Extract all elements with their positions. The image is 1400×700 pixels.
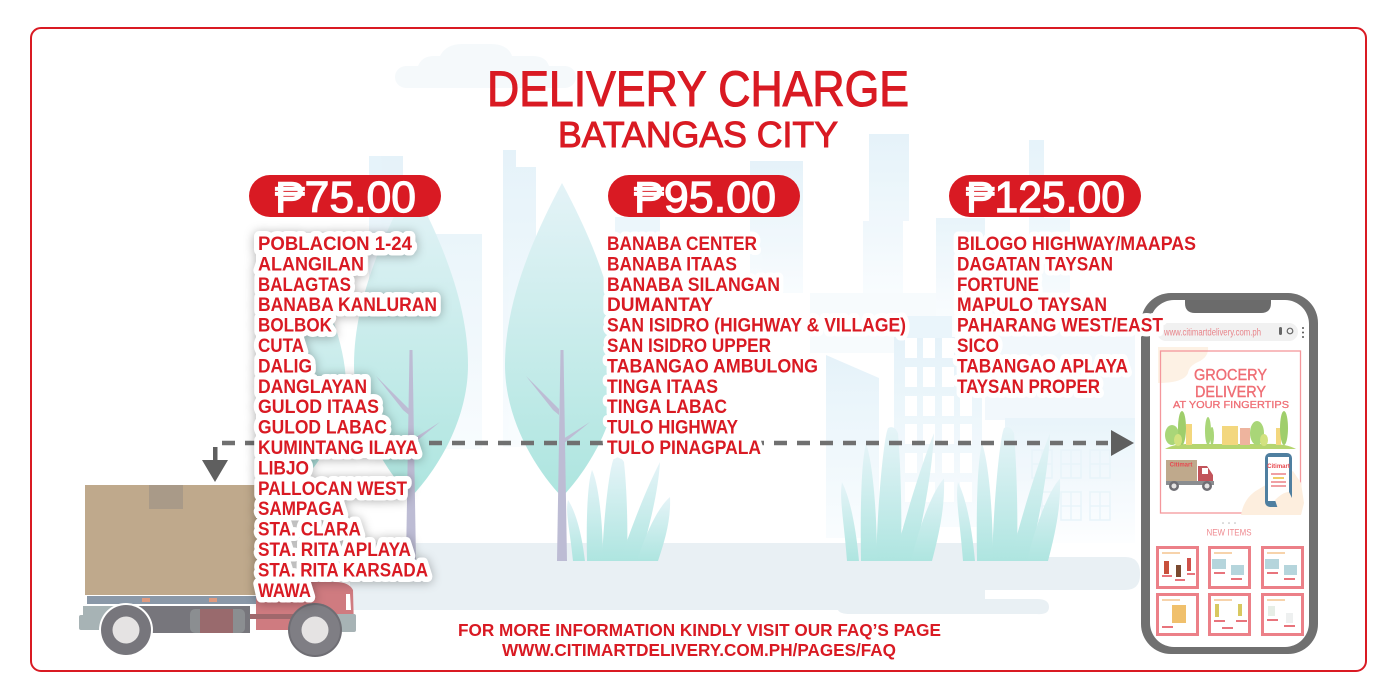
column: 125 pesos barangays: FORTUNE [957, 274, 1039, 296]
grocery delivery banner: Citimart [1170, 462, 1192, 468]
grocery delivery banner: GROCERY [1194, 367, 1267, 384]
price pill 125: ₱125.00 [966, 173, 1125, 222]
column: 95 pesos barangays: TULO PINAGPALA [607, 437, 761, 459]
column: 75 pesos barangays: WAWA [258, 580, 311, 602]
dashed route arrow [222, 430, 1134, 456]
grass tuft middle [567, 457, 670, 561]
column: 95 pesos barangays: TINGA LABAC [607, 396, 727, 418]
price pill 75: ₱75.00 [275, 173, 416, 222]
delivery truck [79, 485, 356, 657]
product thumbnail contents [1162, 552, 1297, 629]
grass tuft right two [957, 427, 1060, 561]
column: 75 pesos barangays: GULOD LABAC [258, 417, 387, 439]
column: 95 pesos barangays: BANABA SILANGAN [607, 274, 780, 296]
column: 95 pesos barangays: BANABA ITAAS [607, 253, 737, 275]
column: 75 pesos barangays: DALIG [258, 355, 312, 377]
new items heading: NEW ITEMS [1206, 528, 1252, 538]
background: city skyline [369, 134, 1135, 543]
grocery delivery banner: Citimart [1267, 464, 1290, 470]
column: 75 pesos barangays: STA. RITA KARSADA [258, 559, 428, 581]
grocery delivery banner: AT YOUR FINGERTIPS [1173, 399, 1289, 411]
column: 75 pesos barangays: PALLOCAN WEST [258, 478, 407, 500]
phone mockup: www.citimartdelivery.com.ph [1163, 328, 1261, 338]
column: 75 pesos barangays: STA. RITA APLAYA [258, 539, 411, 561]
column: 95 pesos barangays [607, 233, 906, 459]
column: 75 pesos barangays: BOLBOK [258, 315, 332, 337]
column: 125 pesos barangays: SICO [957, 335, 999, 357]
column: 75 pesos barangays: POBLACION 1-24 [258, 233, 412, 255]
column: 125 pesos barangays: MAPULO TAYSAN [957, 294, 1107, 316]
column: 95 pesos barangays: TULO HIGHWAY [607, 417, 738, 439]
column: 75 pesos barangays: KUMINTANG ILAYA [258, 437, 418, 459]
grocery delivery banner [1158, 347, 1304, 515]
column: 95 pesos barangays: DUMANTAY [607, 294, 713, 316]
column: 125 pesos barangays: BILOGO HIGHWAY/MAAPAS [957, 233, 1196, 255]
truck cab [256, 582, 354, 630]
column: 75 pesos barangays: SAMPAGA [258, 498, 344, 520]
subtitle: BATANGAS CITY [558, 114, 838, 155]
mini truck [1166, 460, 1197, 481]
footer note: FOR MORE INFORMATION KINDLY VISIT OUR FAQ’S PAGE [458, 620, 941, 640]
column: 125 pesos barangays: PAHARANG WEST/EAST [957, 315, 1163, 337]
phone mockup [1141, 293, 1318, 654]
tree middle [505, 183, 619, 561]
column: 95 pesos barangays: SAN ISIDRO UPPER [607, 335, 771, 357]
price pill 95: ₱95.00 [634, 173, 776, 222]
tree left [354, 183, 468, 561]
truck wheels [99, 603, 153, 657]
grocery delivery banner: DELIVERY [1195, 384, 1266, 401]
column: 75 pesos barangays: BALAGTAS [258, 274, 351, 296]
grass tuft right one [841, 427, 944, 561]
column: 75 pesos barangays: BANABA KANLURAN [258, 294, 437, 316]
truck cargo box [85, 485, 260, 595]
pagination dots [1222, 522, 1236, 524]
column: 125 pesos barangays [957, 233, 1196, 398]
phone body [1141, 293, 1318, 654]
background: cloud [395, 44, 576, 88]
column: 75 pesos barangays: CUTA [258, 335, 304, 357]
footer note: WWW.CITIMARTDELIVERY.COM.PH/PAGES/FAQ [502, 640, 896, 660]
hand with phone [1241, 471, 1304, 515]
tree far left [264, 250, 346, 484]
title: DELIVERY CHARGE [487, 61, 909, 117]
product thumbnails [1158, 548, 1302, 634]
column: 75 pesos barangays: ALANGILAN [258, 253, 364, 275]
column: 95 pesos barangays: BANABA CENTER [607, 233, 757, 255]
footer note [458, 620, 941, 660]
column: 75 pesos barangays: LIBJO [258, 457, 309, 479]
column: 125 pesos barangays: TAYSAN PROPER [957, 376, 1100, 398]
column: 75 pesos barangays: STA. CLARA [258, 519, 361, 541]
column: 95 pesos barangays: TINGA ITAAS [607, 376, 718, 398]
column: 125 pesos barangays: TABANGAO APLAYA [957, 355, 1128, 377]
down arrow to truck [202, 447, 228, 482]
background: ground [350, 543, 1140, 614]
browser bar [1157, 323, 1298, 341]
column: 95 pesos barangays: SAN ISIDRO (HIGHWAY & VILLAGE) [607, 315, 906, 337]
column: 75 pesos barangays [256, 233, 437, 602]
column: 75 pesos barangays: DANGLAYAN [258, 376, 367, 398]
column: 95 pesos barangays: TABANGAO AMBULONG [607, 355, 818, 377]
column: 125 pesos barangays: DAGATAN TAYSAN [957, 253, 1113, 275]
truck chassis [100, 606, 250, 633]
column: 75 pesos barangays: GULOD ITAAS [258, 396, 379, 418]
